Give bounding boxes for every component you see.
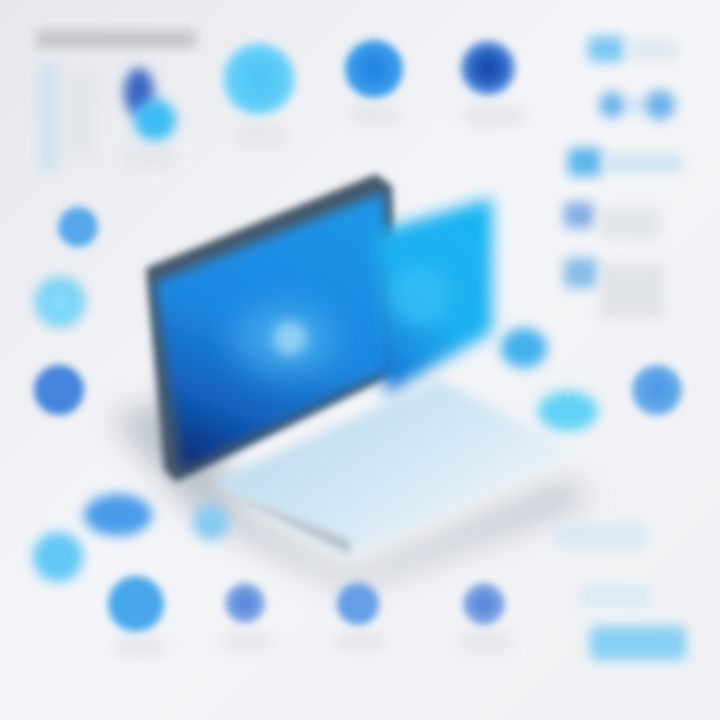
item 4: [564, 202, 594, 228]
captions: [125, 108, 525, 166]
list text: [62, 70, 96, 160]
right column items: [564, 36, 682, 318]
captions: [115, 635, 510, 654]
item 3: [568, 148, 602, 176]
icon: left circle 3: [34, 365, 84, 415]
icon: bottom circle 2: [225, 583, 265, 623]
icon: left circle 2: [35, 277, 85, 327]
bottom right block: [555, 525, 686, 660]
heading bar: [36, 30, 196, 48]
item 5: [564, 258, 598, 288]
icon: cyan bubble: [538, 391, 598, 431]
icon: lock accent: [134, 99, 176, 141]
base front edge: [222, 490, 350, 555]
bottom icon row: [108, 576, 510, 654]
faint lines: [580, 585, 650, 607]
faint chart text: [555, 525, 645, 547]
screen play icon: [273, 321, 307, 355]
laptop shadow: [110, 395, 590, 590]
secondary floating panel: [375, 198, 492, 395]
item 1: [588, 36, 624, 62]
item 5 text: [600, 264, 664, 318]
heading block top-left: [36, 30, 196, 172]
laptop lid frame: [146, 174, 398, 482]
panel highlight: [390, 265, 450, 325]
icon: small circle: [193, 504, 229, 540]
item 1 text: [628, 40, 678, 60]
icon: bottom circle 3: [337, 583, 379, 625]
screen glow: [235, 304, 335, 376]
icon: right circle: [632, 365, 682, 415]
laptop illustration: [110, 174, 590, 590]
icon: left circle 1: [58, 207, 98, 247]
icon: lock: [124, 68, 154, 116]
laptop keyboard base: [212, 380, 575, 552]
icon: oval badge: [84, 494, 152, 536]
icon: large cyan circle: [222, 42, 296, 116]
item 4 text: [600, 208, 660, 238]
cyan banner: [590, 626, 686, 660]
icon: blue circle: [345, 40, 403, 98]
icon: cyan circle: [33, 532, 83, 582]
right floating icons: [501, 328, 682, 431]
main screen: [155, 192, 392, 470]
left icon column: [34, 207, 98, 415]
icon: bottom circle 1: [108, 576, 164, 632]
icon: bottom circle 4: [463, 583, 505, 625]
top icon row: [124, 40, 525, 166]
lower left icons: [33, 494, 229, 582]
list column: [38, 62, 60, 172]
item 2 icons: [599, 90, 675, 120]
icon: blue bubble: [501, 328, 547, 368]
item 3 text: [604, 154, 682, 172]
icon: navy circle: [460, 40, 516, 96]
